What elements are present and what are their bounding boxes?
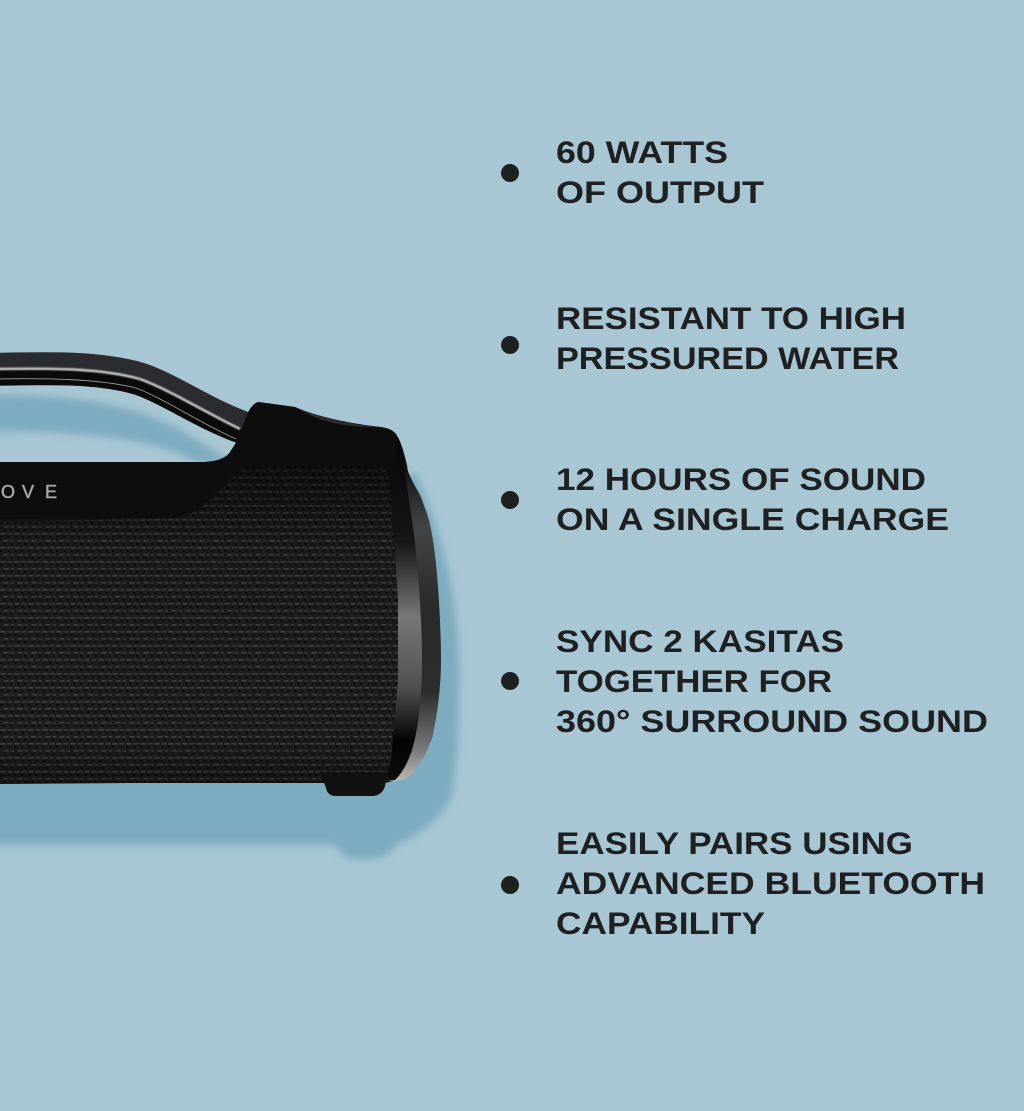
speaker drop shadow: [0, 395, 459, 859]
text: EASILY PAIRS USING: [556, 825, 913, 861]
speaker fabric: [0, 465, 398, 784]
speaker handle: [0, 369, 244, 439]
top band shading: [0, 402, 410, 519]
top button: [295, 407, 380, 427]
bullet: [501, 491, 519, 509]
speaker foot: [320, 772, 388, 796]
speaker: [0, 369, 441, 796]
feature: water resistance: [501, 300, 906, 376]
text: ADVANCED BLUETOOTH: [556, 865, 985, 901]
text: ON A SINGLE CHARGE: [556, 501, 949, 537]
feature: bluetooth: [501, 825, 985, 941]
bullet: [501, 164, 519, 182]
text: CAPABILITY: [556, 905, 765, 941]
text: RESISTANT TO HIGH: [556, 300, 906, 336]
text: TOGETHER FOR: [556, 663, 832, 699]
text: 12 HOURS OF SOUND: [556, 461, 926, 497]
feature: 60 watts: [501, 134, 764, 210]
bullet: [501, 672, 519, 690]
outer rim: [388, 463, 441, 781]
text: PRESSURED WATER: [556, 340, 899, 376]
bullet: [501, 876, 519, 894]
text: 360° SURROUND SOUND: [556, 703, 988, 739]
text: 60 WATTS: [556, 134, 728, 170]
inner rim: [386, 440, 422, 781]
text: OF OUTPUT: [556, 174, 764, 210]
feature: sync: [501, 623, 988, 739]
speaker body: [0, 402, 420, 783]
text: SYNC 2 KASITAS: [556, 623, 844, 659]
feature: battery life: [501, 461, 949, 537]
bullet: [501, 336, 519, 354]
brand logo: OVE: [1, 482, 57, 502]
